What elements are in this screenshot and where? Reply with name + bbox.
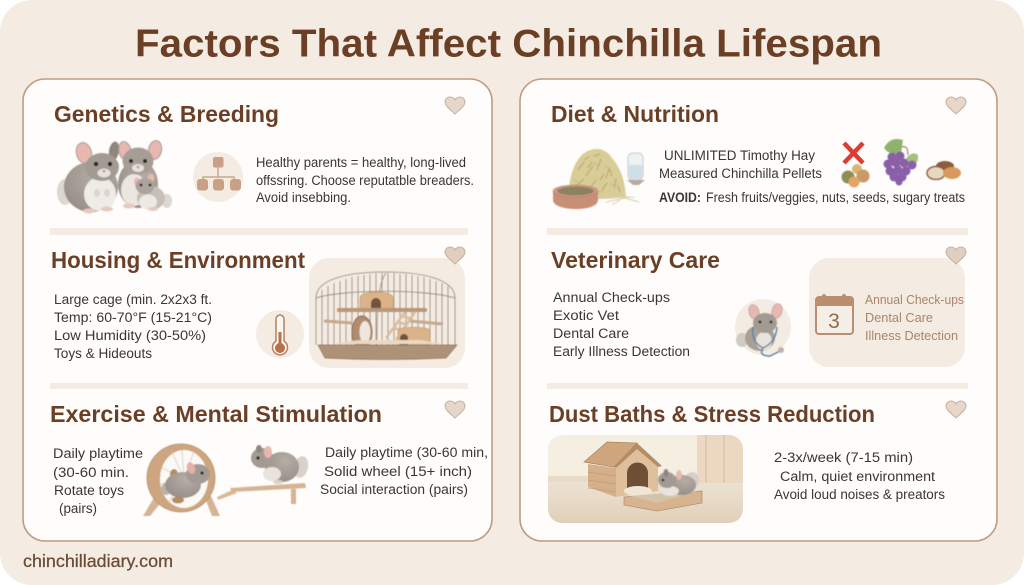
text: foods to avoid: AVOID:: [659, 190, 701, 205]
text: vet care list: Exotic Vet: [553, 308, 619, 323]
icon: heart: [445, 97, 465, 114]
illustration: chinchilla in wheel: [143, 444, 220, 516]
section: genetics and breeding: [54, 97, 474, 214]
text: diet staples: Measured Chinchilla Pellets: [659, 166, 822, 181]
icon: heart: [946, 247, 966, 264]
text: vet care list: Early Illness Detection: [553, 344, 690, 359]
text: dust bath advice: Calm, quiet environment: [780, 469, 935, 484]
illustration: hay, bowl and water bottle: [553, 149, 645, 209]
section: housing and environment: [51, 247, 465, 368]
icon: family tree: [193, 152, 243, 202]
section: exercise and mental stimulation: [50, 401, 488, 516]
text: playtime right: Solid wheel (15+ inch): [324, 464, 472, 479]
panel: right card: [520, 79, 997, 541]
heading: housing: Housing & Environment: [51, 247, 305, 273]
text: housing requirements: [54, 292, 212, 361]
text: housing requirements: Toys & Hideouts: [54, 346, 152, 361]
heading: genetics: Genetics & Breeding: [54, 101, 279, 127]
text: housing requirements: Temp: 60-70°F (15-21°C): [54, 310, 212, 325]
text: playtime left: Daily playtime: [53, 446, 143, 461]
text: vet care list: Dental Care: [553, 326, 629, 341]
text: dust bath advice: [774, 450, 945, 502]
icon: heart: [445, 401, 465, 418]
illustration: cage panel: [309, 258, 465, 368]
icon: grapes: [884, 139, 918, 186]
callout: check-up panel: [809, 258, 965, 367]
text: dust bath advice: 2-3x/week (7-15 min): [774, 450, 913, 465]
illustration: chinchilla family: [57, 139, 172, 214]
icon: heart: [946, 97, 966, 114]
illustration: chinchilla with stethoscope: [735, 299, 791, 356]
icon: heart: [445, 247, 465, 264]
text: playtime left: (30-60 min.: [53, 465, 129, 480]
icon: thermometer: [256, 310, 304, 358]
text: playtime left: (pairs): [59, 501, 97, 516]
heading: dust baths: Dust Baths & Stress Reduction: [549, 401, 875, 427]
illustration: dust bath house: [548, 435, 743, 523]
text: playtime left: Rotate toys: [54, 483, 124, 498]
icon: red cross: [844, 143, 863, 163]
text: check-up list: Annual Check-ups: [865, 293, 964, 307]
text: diet staples: [659, 148, 822, 181]
heading: exercise: Exercise & Mental Stimulation: [50, 401, 382, 427]
text: housing requirements: Low Humidity (30-50%): [54, 328, 206, 343]
icon: heart: [946, 401, 966, 418]
text: dust bath advice: Avoid loud noises & preators: [774, 487, 945, 502]
heading: diet: Diet & Nutrition: [551, 101, 719, 127]
footer: website: chinchilladiary.com: [23, 551, 173, 571]
section: diet and nutrition: [551, 97, 966, 209]
text: housing requirements: Large cage (min. 2x2x3 ft.: [54, 292, 212, 307]
text: genetics advice: [256, 155, 474, 205]
text: check-up list: [865, 293, 964, 343]
text: genetics advice: offssring. Choose reputatble breaders.: [256, 173, 474, 188]
heading: veterinary: Veterinary Care: [551, 247, 720, 273]
text: check-up list: Dental Care: [865, 311, 933, 325]
text: playtime left: [53, 446, 143, 516]
icon: brown nuts: [927, 161, 961, 180]
text: vet care list: Annual Check-ups: [553, 290, 670, 305]
text: genetics advice: Avoid insebbing.: [256, 190, 351, 205]
text: diet staples: UNLIMITED Timothy Hay: [664, 148, 815, 163]
icon: mixed nuts: [842, 164, 870, 188]
text: foods to avoid: Fresh fruits/veggies, nuts, seeds, sugary treats: [706, 190, 965, 205]
section: veterinary care: [551, 247, 966, 367]
icon: calendar: 3: [828, 310, 840, 333]
panel: left card: [23, 79, 492, 541]
text: vet care list: [553, 290, 690, 359]
text: playtime right: Daily playtime (30-60 min,: [325, 445, 488, 460]
text: check-up list: Illness Detection: [865, 329, 958, 343]
illustration: chinchilla on ramp: [217, 445, 310, 504]
icon: calendar: [816, 294, 853, 334]
text: playtime right: [320, 445, 488, 497]
title: Factors That Affect Chinchilla Lifespan: [135, 22, 882, 66]
section: dust baths and stress reduction: [548, 401, 966, 523]
text: genetics advice: Healthy parents = healthy, long-lived: [256, 155, 466, 170]
text: playtime right: Social interaction (pairs): [320, 482, 468, 497]
